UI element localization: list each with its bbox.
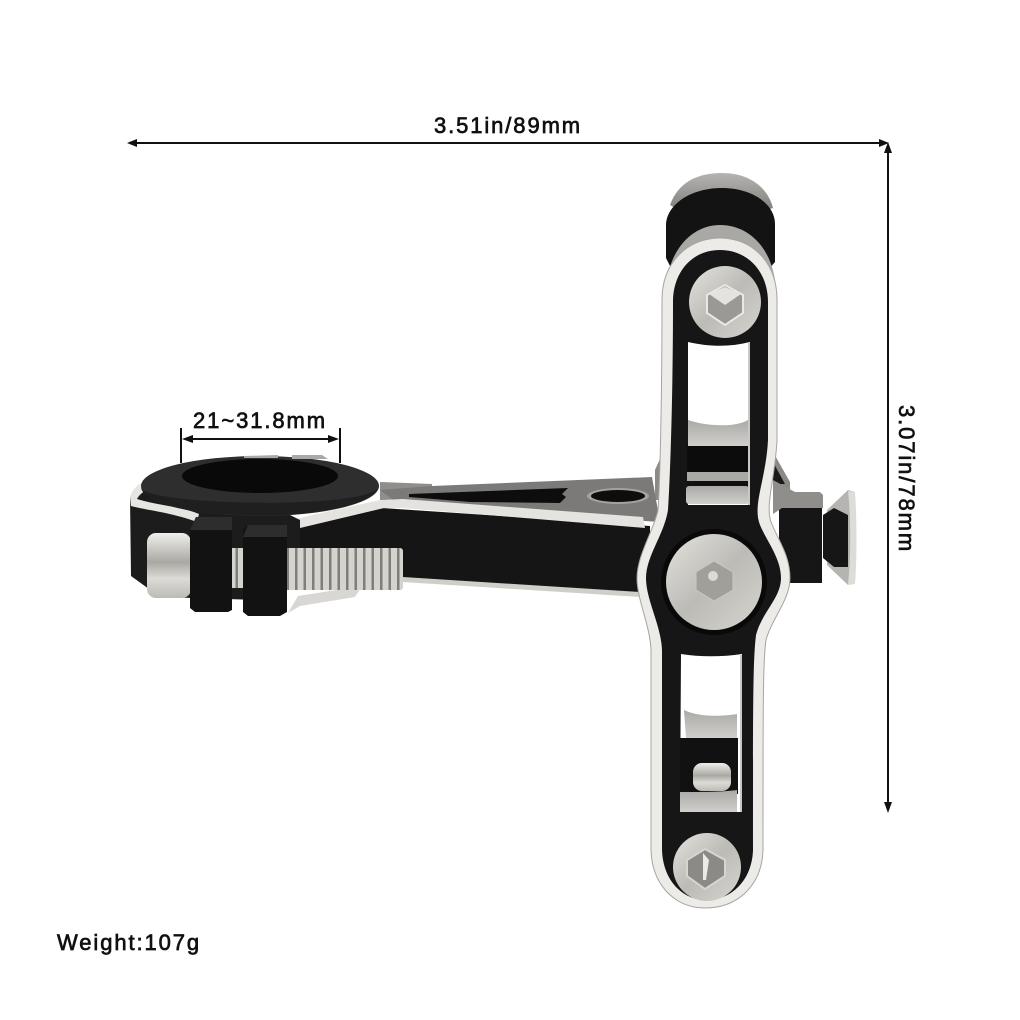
T-bar arm shoulder band	[666, 225, 776, 290]
arm through-hole	[587, 488, 649, 504]
T-bar arm silver outline	[637, 238, 790, 908]
clamp diameter label: 21~31.8mm	[193, 408, 327, 433]
top bolt	[689, 266, 761, 338]
horizontal arm	[281, 477, 660, 613]
bottom bolt	[673, 833, 741, 901]
clamp bore	[182, 459, 338, 493]
upper arm plate	[380, 477, 660, 522]
arm body	[285, 508, 650, 596]
clamp diameter dimension	[181, 428, 340, 463]
width dimension arrow	[127, 139, 889, 147]
height dimension arrow	[884, 142, 892, 813]
clamp body	[130, 484, 300, 600]
mount product photo	[130, 173, 856, 908]
rear bottle-cage arm	[655, 173, 790, 500]
arm slot	[409, 488, 568, 503]
lower window	[680, 654, 742, 812]
threaded rod behind arm	[380, 482, 432, 505]
clamp rubber ring	[141, 456, 379, 516]
height label: 3.07in/78mm	[894, 405, 919, 553]
clamp bolt head	[147, 533, 191, 598]
rear block and wing bolt	[773, 480, 856, 585]
arm silver edge	[281, 499, 645, 545]
T-bar arm black face	[646, 250, 781, 900]
weight label: Weight:107g	[57, 930, 201, 955]
center bolt	[661, 529, 767, 635]
handlebar clamp	[130, 455, 379, 600]
clamp blocks	[190, 517, 287, 616]
lower window screw	[693, 763, 731, 791]
width label: 3.51in/89mm	[434, 113, 582, 138]
upper window	[686, 342, 750, 505]
clamp screw thread	[285, 548, 403, 590]
